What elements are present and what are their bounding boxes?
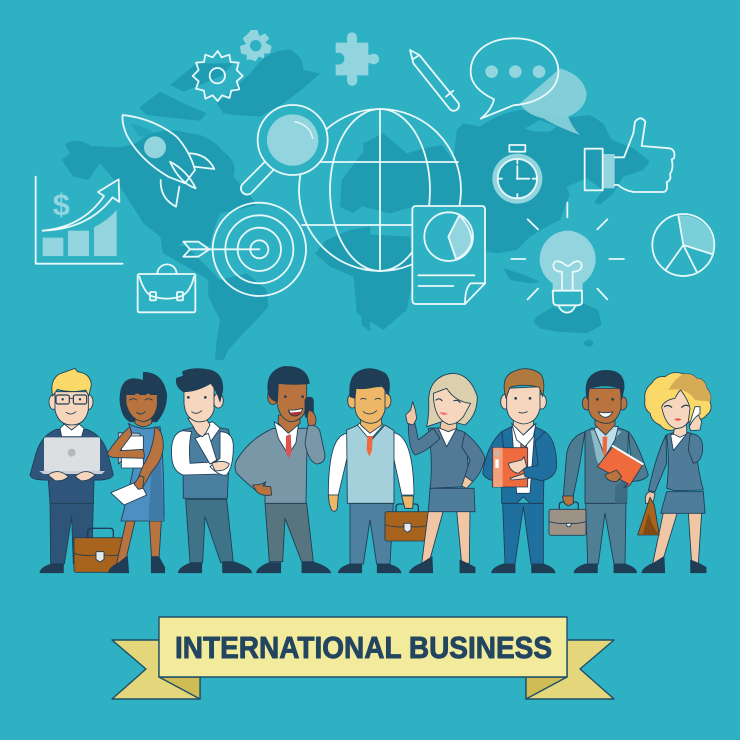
icon: thumbs up: [585, 118, 674, 192]
banner: ribbon with title: [112, 617, 614, 699]
ribbon: main panel: [159, 617, 567, 677]
briefcase: brown: [74, 528, 123, 572]
icon: growth chart with dollar: [36, 177, 123, 264]
row of business people: [30, 367, 711, 573]
icon: pie chart: [652, 214, 714, 276]
icon: document with pie chart: [412, 206, 485, 304]
icon: filled speech bubble: [520, 68, 587, 135]
icon: magnifying glass: [241, 105, 328, 195]
icon: light bulb: [511, 203, 624, 313]
map: eurasia and australia: [350, 110, 650, 347]
icon: growth chart with dollar: $: [53, 188, 70, 222]
person 9: curly blonde woman on phone with handbag: [638, 372, 711, 573]
ribbon: right tail: [526, 640, 614, 699]
icon: outlined speech bubble: [471, 38, 558, 119]
person 7: man in blue suit holding orange binder: [483, 369, 557, 573]
ribbon: right fold: [526, 677, 567, 699]
person 6: woman in grey suit pointing up: [406, 373, 485, 573]
briefcase: brown: [385, 496, 429, 541]
icon: pencil: [410, 50, 459, 111]
ribbon: left fold: [159, 677, 200, 699]
person 2: woman in blue dress: [107, 372, 167, 573]
icon: rocket: [122, 115, 214, 207]
right icons group: [410, 38, 714, 313]
world map background: [62, 49, 650, 360]
icon: cog outline: [193, 51, 243, 101]
title: INTERNATIONAL BUSINESS: [175, 630, 552, 665]
person 1: blond man with laptop and briefcase: [30, 368, 113, 573]
icon: small cog filled: [240, 30, 272, 61]
person 4: man in grey sweater on phone: [235, 367, 331, 573]
icon: target with arrow: [183, 203, 306, 296]
person 8: smiling man with book and grey briefcase: [563, 370, 648, 573]
icon: puzzle piece: [336, 32, 379, 86]
icons group: [36, 30, 461, 312]
icon: globe: [299, 109, 461, 271]
ribbon: left tail: [112, 640, 200, 699]
person 3: man in vest, thinking: [171, 369, 252, 573]
icon: stopwatch: [492, 145, 542, 204]
person 5: man in light blue vest with briefcase: [328, 369, 414, 573]
briefcase: grey: [549, 496, 586, 535]
icon: briefcase: [138, 264, 195, 312]
map: americas and greenland: [62, 49, 370, 360]
